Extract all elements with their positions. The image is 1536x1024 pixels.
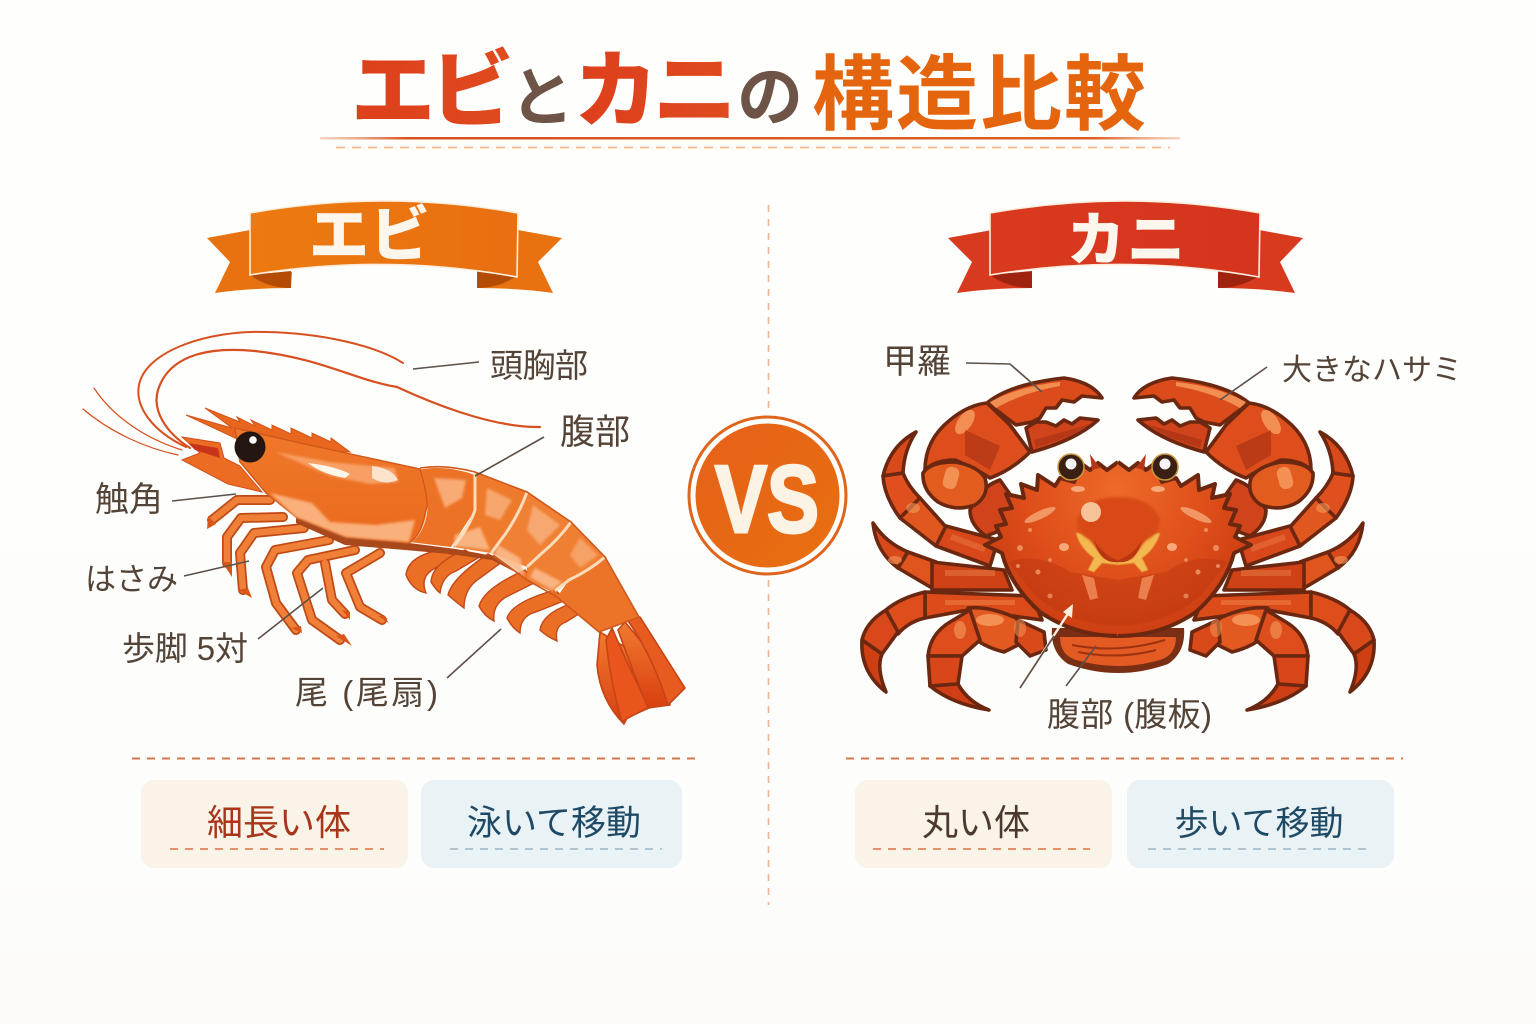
label: 甲羅: 甲羅 bbox=[883, 343, 951, 381]
crab forehead lobe bbox=[1077, 497, 1160, 562]
label: 大きなハサミ: 大きなハサミ bbox=[1282, 354, 1462, 387]
banner text: エビ bbox=[309, 202, 431, 269]
label: 甲羅 bbox=[883, 343, 1042, 392]
carapace light patch bbox=[270, 493, 415, 542]
label: はさみ bbox=[85, 561, 249, 597]
VS text: VS bbox=[715, 446, 819, 553]
tail fan bbox=[597, 617, 685, 724]
label: 尾(尾扇) bbox=[295, 629, 501, 711]
title: エビ bbox=[351, 44, 510, 138]
title: の bbox=[737, 60, 803, 134]
crab illustration bbox=[862, 378, 1374, 710]
mouth parts bbox=[182, 437, 262, 492]
banner text: カニ bbox=[1067, 208, 1187, 273]
feature card: 歩いて移動 bbox=[1127, 780, 1394, 868]
label: 頭胸部: 頭胸部 bbox=[490, 347, 588, 384]
body seams bbox=[411, 470, 605, 590]
label: 腹部(腹板) bbox=[1020, 604, 1212, 733]
banner: エビ bbox=[207, 201, 562, 293]
title bbox=[351, 44, 1146, 141]
title underline bbox=[320, 137, 1180, 148]
label: 触角: 触角 bbox=[95, 481, 163, 519]
shrimp eye bbox=[234, 432, 266, 462]
VS badge bbox=[689, 417, 846, 574]
crab right half bbox=[1117, 378, 1374, 710]
crab labels and leaders bbox=[883, 343, 1462, 733]
label: 腹部(腹板): 腹部 (腹板) bbox=[1047, 696, 1212, 733]
crab left half bbox=[862, 378, 1119, 710]
feature card: 泳いて移動 bbox=[421, 780, 682, 868]
carapace bbox=[235, 428, 427, 543]
title: カニ bbox=[574, 44, 732, 138]
feature card: 泳いて移動: 泳いて移動 bbox=[467, 804, 641, 843]
label: 歩脚5対: 歩脚 5対 bbox=[122, 630, 248, 667]
segment highlights bbox=[434, 478, 598, 590]
label: 触角 bbox=[95, 481, 236, 519]
crab abdomen plate bbox=[1052, 628, 1184, 673]
feature card: 細長い体: 細長い体 bbox=[207, 802, 351, 843]
title: と bbox=[510, 62, 574, 134]
shrimp illustration bbox=[83, 332, 685, 724]
label: 腹部: 腹部 bbox=[560, 413, 630, 452]
walking legs bbox=[212, 500, 382, 640]
label: 歩脚5対 bbox=[122, 588, 323, 667]
banner: カニ bbox=[948, 201, 1303, 293]
center divider bbox=[768, 205, 770, 905]
shrimp labels and leaders bbox=[85, 347, 630, 711]
dashed separators bbox=[132, 758, 1403, 760]
swimmerets bbox=[406, 550, 582, 641]
body outline bbox=[420, 467, 639, 632]
label: 大きなハサミ bbox=[1220, 354, 1462, 400]
antennae bbox=[83, 332, 540, 455]
label: 頭胸部 bbox=[413, 347, 588, 384]
label: はさみ: はさみ bbox=[85, 562, 178, 597]
body shell segments bbox=[409, 468, 639, 632]
feature card: 細長い体 bbox=[141, 780, 408, 868]
feature card: 歩いて移動: 歩いて移動 bbox=[1175, 805, 1343, 843]
label: 尾(尾扇): 尾 (尾扇) bbox=[295, 674, 438, 711]
rostrum spikes bbox=[186, 408, 350, 452]
feature card: 丸い体 bbox=[855, 780, 1112, 868]
leg tips bbox=[207, 516, 389, 646]
label: 腹部 bbox=[475, 413, 630, 476]
title: 構造比較 bbox=[812, 50, 1146, 141]
underside shadow bbox=[296, 517, 515, 572]
feature card: 丸い体: 丸い体 bbox=[922, 802, 1030, 843]
